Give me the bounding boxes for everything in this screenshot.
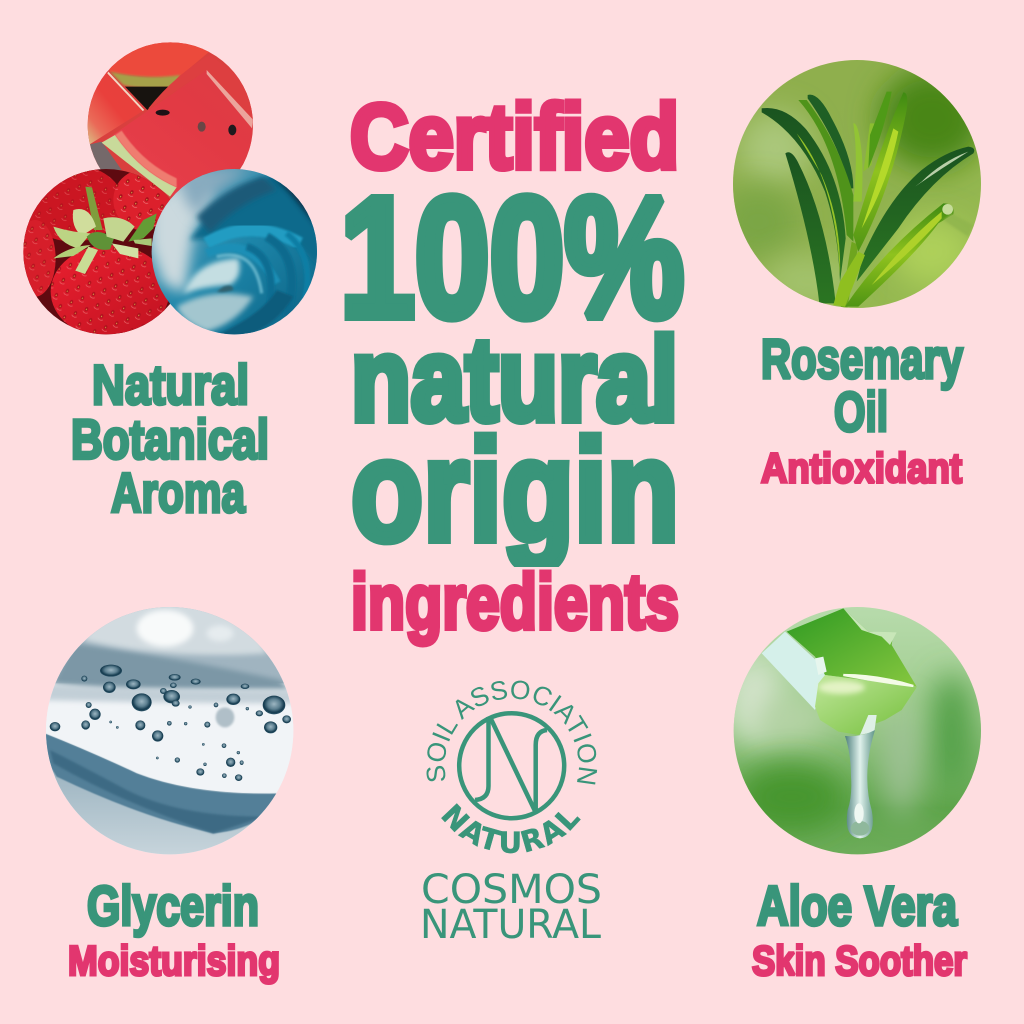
image: watermelon main slice (102, 70, 253, 197)
label: Rosemary Oil Antioxidant: Antioxidant (761, 444, 962, 492)
label: Glycerin Moisturising (68, 874, 280, 984)
image: rosemary (733, 60, 981, 308)
icon: N in circle (459, 713, 564, 818)
heading: Certified: Certified (350, 86, 679, 188)
rosemary leaves (762, 92, 974, 312)
label: Natural Botanical Aroma: Aroma (111, 461, 246, 524)
label: Aloe Vera Skin Soother (752, 874, 967, 984)
text: Cosmos Natural: NATURAL (420, 902, 602, 948)
label: Glycerin Moisturising: Moisturising (68, 937, 280, 984)
heading: natural: natural (351, 314, 678, 446)
image: strawberries (23, 169, 170, 334)
label: Aloe Vera Skin Soother: Aloe Vera (757, 874, 958, 937)
icon: strawberry leaves (53, 187, 157, 274)
image: watermelon (88, 42, 253, 200)
heading: origin: origin (351, 410, 679, 571)
label: Glycerin Moisturising: Glycerin (87, 874, 259, 937)
headline (340, 86, 684, 646)
label: Natural Botanical Aroma: Botanical (71, 408, 269, 470)
label: Rosemary Oil Antioxidant: Oil (834, 380, 888, 443)
label: Aloe Vera Skin Soother: Skin Soother (752, 937, 967, 984)
aloe gel drip (845, 715, 877, 838)
label: Rosemary Oil Antioxidant (761, 327, 963, 492)
bubbles (50, 665, 291, 781)
text: Cosmos Natural (420, 867, 602, 948)
image: ocean wave (150, 168, 320, 338)
heading: ingredients: ingredients (351, 558, 679, 646)
image cluster: natural botanical aroma (14, 40, 320, 338)
text: Cosmos Natural: COSMOS (421, 867, 602, 913)
text: Soil Association: SOIL ASSOCIATION (426, 680, 598, 784)
text: Natural: NATURAL (441, 803, 581, 854)
logo: Soil Association Natural (426, 680, 598, 854)
label: Natural Botanical Aroma (71, 353, 269, 524)
image: aloe vera (734, 607, 981, 854)
aloe leaf (762, 608, 917, 735)
image: glycerin gel with bubbles (40, 600, 300, 860)
label: Rosemary Oil Antioxidant: Rosemary (761, 327, 963, 390)
heading: 100%: 100% (340, 163, 684, 353)
label: Natural Botanical Aroma: Natural (92, 353, 249, 416)
